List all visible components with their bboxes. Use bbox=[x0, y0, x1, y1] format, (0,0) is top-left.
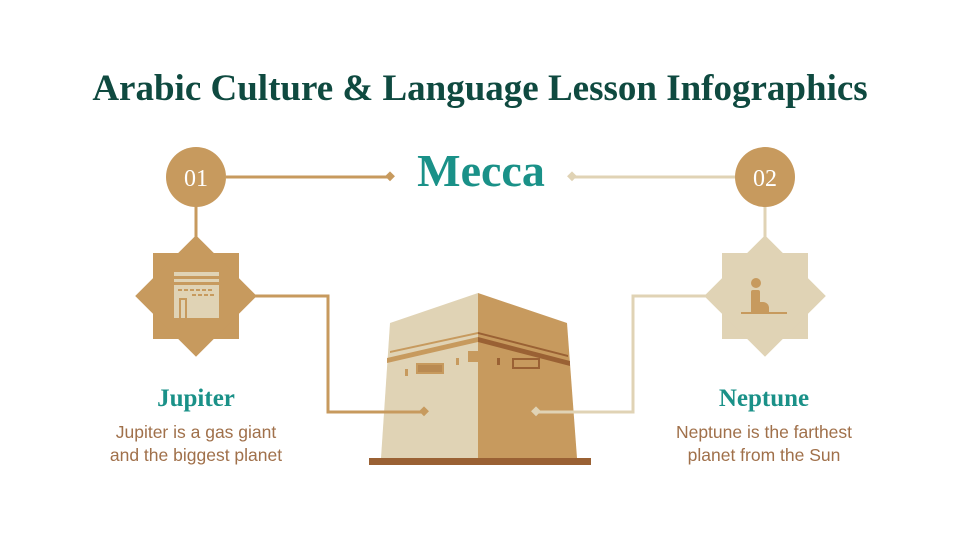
connector: left star to kaaba bbox=[250, 296, 429, 416]
kaaba bbox=[369, 293, 591, 465]
connector: 02 to title bbox=[567, 171, 736, 181]
badge 01 bbox=[166, 147, 226, 207]
connector: 01 to title bbox=[226, 171, 395, 181]
badge 01: 01 bbox=[184, 166, 208, 192]
text block: Neptune bbox=[676, 385, 852, 465]
text block: Neptune: planet from the Sun bbox=[688, 445, 840, 465]
star 02 with prayer icon bbox=[704, 235, 826, 357]
star 01 with kaaba icon bbox=[135, 235, 257, 357]
badge 02: 02 bbox=[753, 166, 777, 192]
text block: Jupiter: Jupiter is a gas giant bbox=[116, 422, 276, 442]
badge 02 bbox=[735, 147, 795, 207]
connector: right star to kaaba bbox=[531, 296, 710, 416]
text block: Neptune: Neptune is the farthest bbox=[676, 422, 852, 442]
connector: 02 vertical bbox=[764, 205, 766, 240]
icon: praying person bbox=[741, 278, 787, 314]
heading: Mecca: Mecca bbox=[417, 145, 545, 196]
text block: Jupiter: and the biggest planet bbox=[110, 445, 282, 465]
text block: Jupiter bbox=[110, 385, 282, 465]
text block: Jupiter: Jupiter bbox=[157, 385, 235, 412]
title: Arabic Culture & Language Lesson Infographics bbox=[92, 68, 868, 109]
connector: 01 vertical bbox=[194, 205, 198, 240]
text block: Neptune: Neptune bbox=[719, 385, 809, 412]
icon: kaaba bbox=[174, 272, 219, 318]
